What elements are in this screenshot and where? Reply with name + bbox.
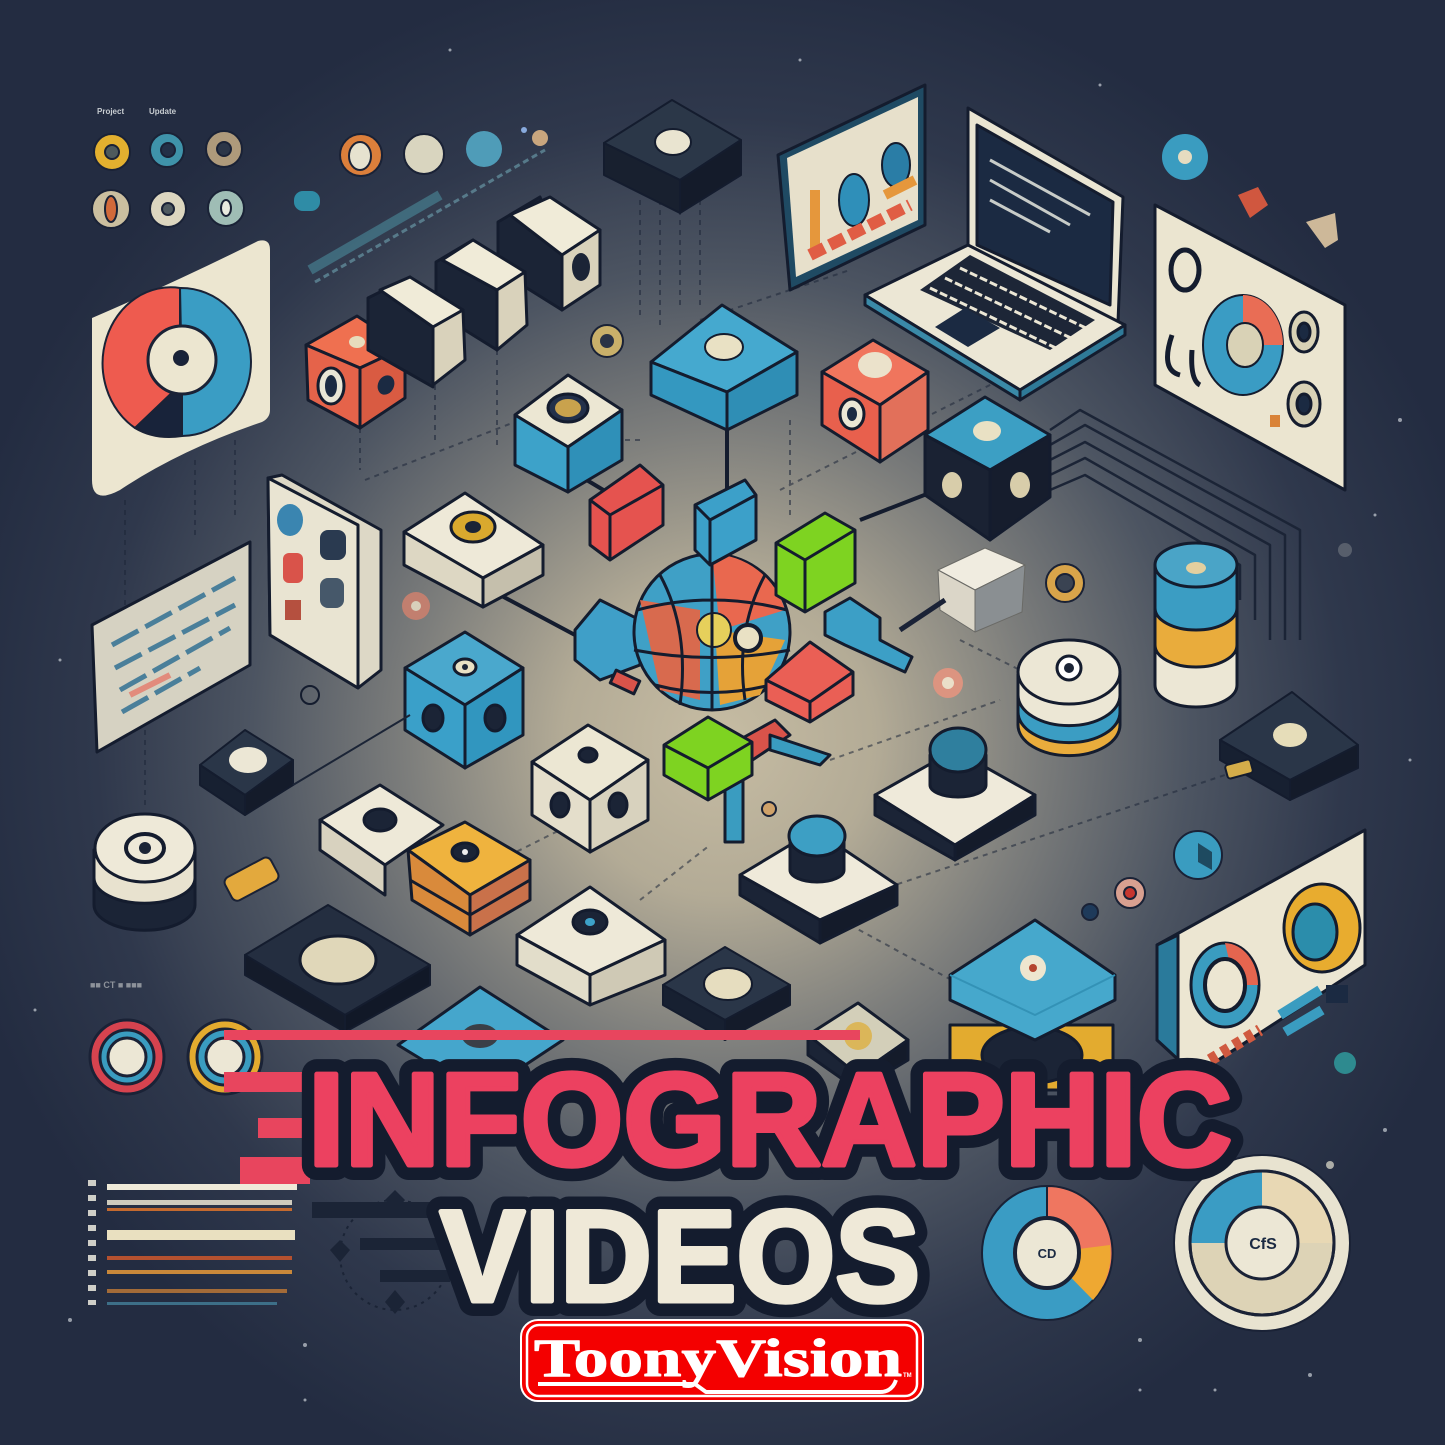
ring small — [591, 325, 623, 357]
stem — [725, 780, 743, 842]
title: infographic: INFOGRAPHIC — [308, 1046, 1232, 1193]
disc stack — [1018, 640, 1120, 756]
dark disc box — [200, 715, 410, 815]
logo: ToonyVision: TM — [903, 1373, 912, 1379]
donut chart: CD — [1038, 1246, 1056, 1261]
dark box lower left — [245, 905, 430, 1032]
disc left — [94, 814, 195, 930]
flat white box — [404, 493, 543, 607]
platform with cap right — [875, 728, 1035, 860]
yellow box — [408, 822, 530, 935]
dashed circle ornament — [330, 1190, 450, 1314]
dark box top with wires — [604, 100, 741, 213]
cube: dark with blue top — [925, 397, 1050, 540]
big blue platform — [950, 920, 1115, 1090]
panel: text card — [92, 542, 250, 752]
yellow pill — [222, 855, 281, 903]
block blue left — [575, 600, 640, 680]
logo: ToonyVision: ToonyVision — [534, 1328, 902, 1388]
panel: pie chart card — [92, 240, 270, 496]
block green lower — [664, 717, 752, 800]
cube: red right — [822, 340, 928, 462]
flat white box lower — [320, 785, 443, 895]
title: infographic: INFOGRAPHIC — [308, 1046, 1232, 1193]
platform with cap — [740, 816, 897, 943]
icon label: update: Update — [149, 107, 177, 116]
dial chart — [1174, 1155, 1350, 1331]
blue box lower — [398, 987, 563, 1095]
title: videos: VIDEOS — [440, 1183, 920, 1329]
small icons top right — [1162, 134, 1338, 248]
wires right — [1050, 410, 1300, 640]
dial chart: CfS — [1249, 1236, 1277, 1253]
dark box lower centre — [663, 947, 790, 1040]
connectors centre — [500, 430, 950, 635]
panel: poster — [268, 475, 381, 704]
legend label: ■■ CT ■ ■■■ — [90, 980, 142, 990]
block blue top — [695, 480, 756, 565]
block row — [368, 197, 600, 387]
block 2 — [436, 240, 527, 350]
dark box right — [1220, 692, 1358, 800]
block red lower — [766, 642, 853, 722]
small box lower — [808, 1003, 908, 1090]
icon label: project: Project — [97, 107, 124, 116]
white box mid — [517, 887, 665, 1005]
cube: blue — [405, 632, 523, 768]
panel: right chart card — [1155, 205, 1345, 490]
rings lower left — [90, 1020, 262, 1094]
block 3 — [498, 197, 600, 310]
block blue right — [825, 598, 912, 672]
status icons grid — [92, 107, 244, 228]
icon row top — [294, 127, 548, 282]
title: videos: VIDEOS — [440, 1183, 920, 1329]
cube: white dice — [532, 725, 648, 852]
rings — [402, 564, 1084, 816]
cylinder stack — [1155, 543, 1237, 707]
donut chart — [982, 1186, 1113, 1320]
panel: dashboard lower right — [1157, 830, 1365, 1075]
block red top — [590, 465, 663, 560]
block 1 — [368, 277, 465, 387]
laptop — [865, 108, 1125, 400]
bars legend — [92, 1180, 297, 1305]
small circles right — [1082, 831, 1356, 1074]
cube: big blue — [651, 305, 797, 430]
title speed bars — [224, 1030, 860, 1184]
grey cube — [900, 548, 1025, 632]
block green top — [776, 513, 855, 612]
central globe cluster — [575, 465, 912, 842]
panel: tablet top — [778, 85, 925, 290]
cube: blue white — [515, 375, 622, 492]
cube: red — [306, 316, 405, 428]
globe — [634, 554, 790, 710]
logo: ToonyVision — [521, 1320, 923, 1401]
